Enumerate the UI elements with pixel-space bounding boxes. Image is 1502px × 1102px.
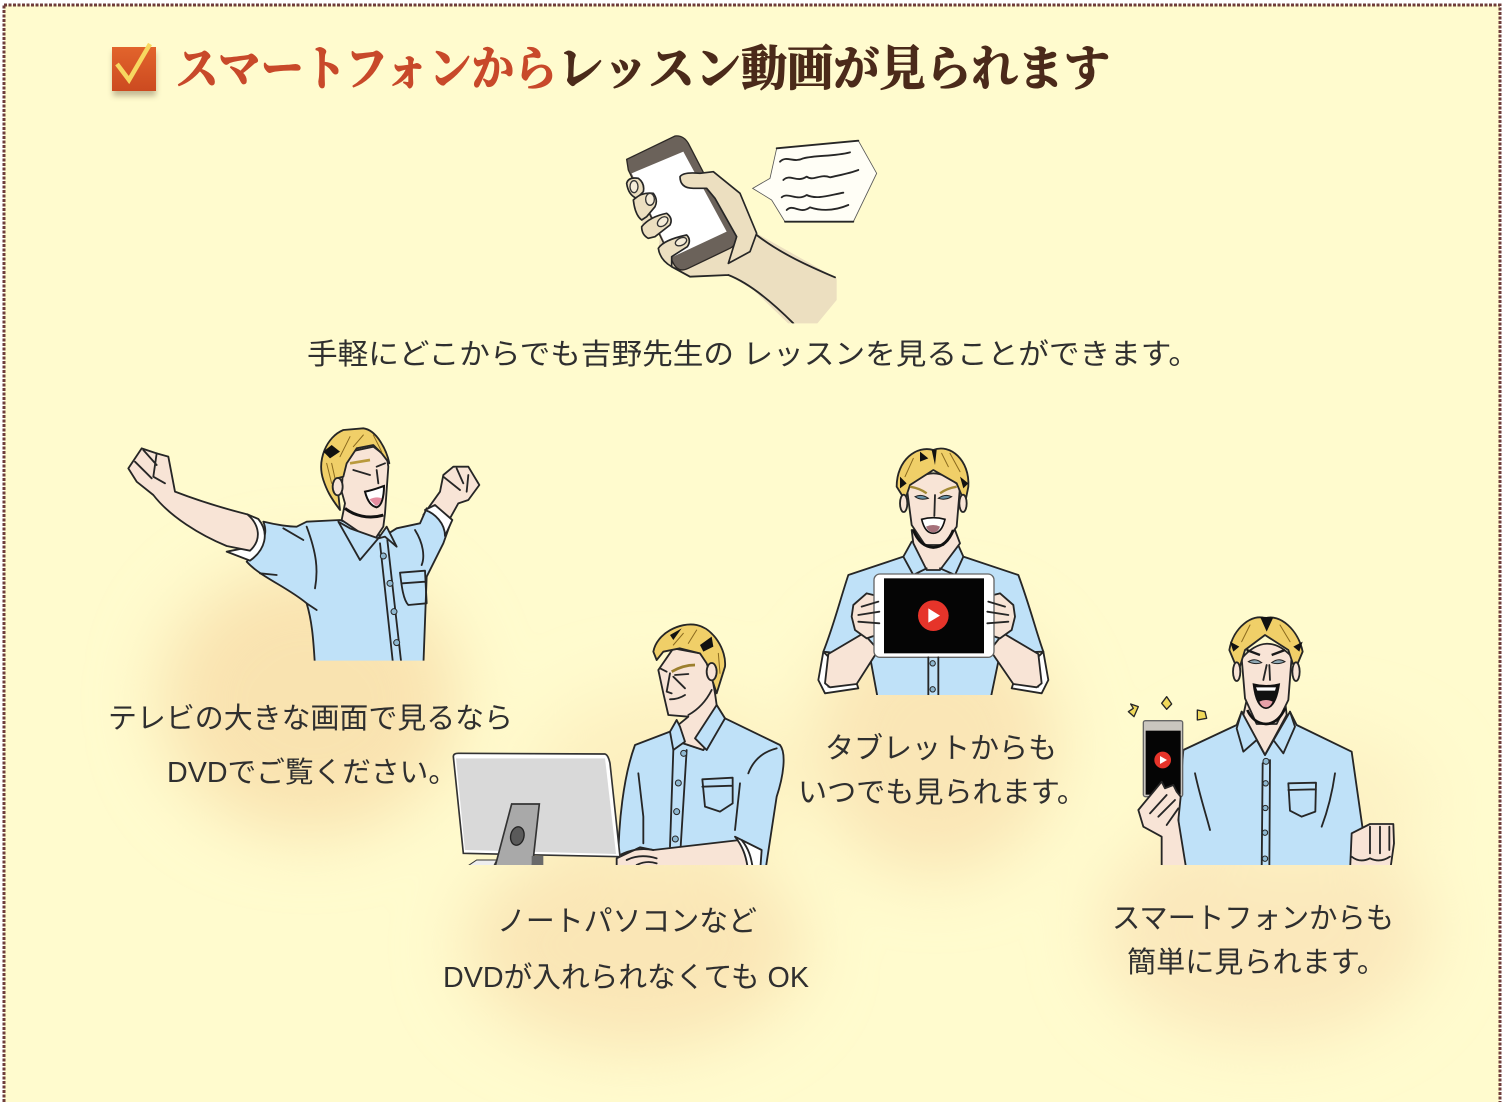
collar bbox=[670, 705, 725, 750]
hand holding phone bbox=[1138, 782, 1187, 872]
ear bbox=[333, 478, 343, 495]
fist bbox=[1350, 824, 1394, 872]
icon: smartphone with play button bbox=[1143, 721, 1183, 797]
neck and face bbox=[658, 648, 725, 750]
left arm bbox=[128, 448, 258, 551]
icon: speech bubble bbox=[753, 141, 877, 222]
shirt bbox=[247, 508, 452, 667]
ears bbox=[1233, 662, 1300, 681]
caption line 2: 簡単に見られます。 bbox=[1127, 946, 1386, 979]
ear bbox=[707, 663, 717, 680]
title text: dark part: レッスン動画が見られます bbox=[557, 43, 1110, 96]
hair shadow and strands bbox=[323, 435, 382, 483]
caption line 1: テレビの大きな画面で見るなら bbox=[108, 702, 513, 735]
caption line 2: DVDでご覧ください。 bbox=[167, 756, 457, 789]
hair bbox=[897, 449, 968, 503]
buttons bbox=[672, 750, 687, 842]
shirt buttons bbox=[380, 553, 400, 646]
face bbox=[907, 473, 960, 545]
caption line 2: DVDが入れられなくても OK bbox=[443, 961, 810, 994]
shirt bbox=[1178, 712, 1363, 872]
cuff bbox=[734, 836, 763, 865]
hair shadow and strands bbox=[900, 450, 968, 488]
face bbox=[1242, 644, 1292, 724]
text: TV caption bbox=[108, 702, 513, 789]
text: tablet caption bbox=[798, 732, 1086, 809]
shirt bbox=[618, 718, 784, 873]
face features bbox=[660, 665, 712, 715]
forearms with cuffs bbox=[818, 633, 1048, 693]
tablet hands bbox=[852, 593, 1015, 638]
arm bbox=[642, 215, 837, 324]
buttons bbox=[1262, 758, 1269, 861]
text: smartphone caption bbox=[1112, 903, 1394, 979]
right arm bbox=[423, 467, 479, 518]
caption line 2: いつでも見られます。 bbox=[798, 777, 1086, 809]
buttons and fingers bbox=[858, 602, 1008, 702]
text: laptop caption bbox=[443, 906, 810, 994]
text: intro sentence: 手軽にどこからでも吉野先生の レッスンを見ることができます。 bbox=[307, 338, 1199, 371]
hair shadow and strands bbox=[670, 628, 720, 673]
title text: red part: スマートフォンから bbox=[176, 43, 557, 96]
shirt detail lines bbox=[620, 748, 777, 865]
neck bbox=[912, 530, 960, 570]
icon: orange checkbox bbox=[112, 44, 156, 96]
illustration: man holding tablet bbox=[818, 449, 1048, 702]
hair bbox=[1229, 617, 1303, 672]
illustration: man using computer bbox=[453, 624, 784, 873]
caption line 1: スマートフォンからも bbox=[1112, 903, 1394, 935]
icon: smartphone bbox=[627, 136, 737, 270]
hair bbox=[321, 428, 389, 510]
face features bbox=[910, 487, 957, 547]
soft glow backgrounds bbox=[160, 565, 1430, 1050]
face features bbox=[1247, 650, 1285, 724]
hair shadow and strands bbox=[1230, 617, 1303, 652]
neck and face bbox=[342, 447, 388, 542]
face features bbox=[345, 460, 385, 517]
caption line 1: ノートパソコンなど bbox=[497, 906, 757, 938]
illustration: man holding smartphone bbox=[1128, 617, 1394, 872]
illustration: hand holding smartphone with speech bubble bbox=[627, 136, 877, 328]
forearm bbox=[616, 840, 746, 865]
sparkles bbox=[1128, 697, 1207, 720]
caption line 1: タブレットからも bbox=[825, 732, 1057, 765]
hair bbox=[653, 624, 725, 693]
ears bbox=[900, 495, 967, 512]
shirt detail lines bbox=[1195, 760, 1335, 872]
shirt bbox=[823, 542, 1043, 702]
illustration: man cheering with raised fists bbox=[128, 428, 479, 667]
fist and shirt detail lines bbox=[135, 450, 468, 667]
icon: tablet with play button bbox=[874, 574, 994, 657]
collar bbox=[338, 522, 397, 560]
thumb and fingers bbox=[627, 172, 757, 267]
neck bbox=[1243, 700, 1287, 755]
sleeve cuffs bbox=[227, 505, 452, 561]
collar bbox=[903, 557, 963, 575]
computer monitor bbox=[453, 753, 620, 873]
collar bbox=[1237, 712, 1295, 755]
heading: smartphone lesson video title bbox=[112, 43, 1110, 96]
